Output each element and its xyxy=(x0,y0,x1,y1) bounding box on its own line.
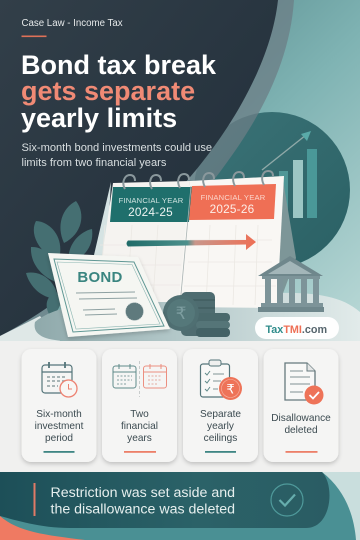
banner text xyxy=(50,485,235,518)
subtitle: Six-month bond investments could use xyxy=(22,142,212,154)
calendar: FINANCIAL YEAR xyxy=(201,193,266,202)
bar chart with rising arrow xyxy=(262,131,317,219)
coins: ₹ xyxy=(176,304,186,323)
TaxTMI logo pill: TaxTMI.com xyxy=(266,324,327,336)
calendar: FINANCIAL YEAR xyxy=(119,196,184,205)
calendar back stand xyxy=(270,180,296,296)
teal circle behind chart xyxy=(194,112,350,268)
bottom teal wave xyxy=(0,472,356,540)
financial year 2024-25 header xyxy=(110,187,192,222)
coral corner xyxy=(0,516,85,540)
card: two financial years: financial xyxy=(121,421,158,432)
leaves xyxy=(26,201,92,316)
dark header shape xyxy=(0,0,278,336)
title: yearly limits xyxy=(21,103,177,133)
card: separate yearly ceilings: yearly xyxy=(207,421,235,432)
title xyxy=(21,50,217,133)
title: gets separate xyxy=(21,76,195,106)
card: two financial years xyxy=(102,349,177,462)
background: teal gradient xyxy=(0,0,360,345)
timeline arrow xyxy=(126,234,256,250)
title: Bond tax break xyxy=(21,50,217,80)
calendar page right xyxy=(178,176,284,308)
pale floor left of pedestal xyxy=(0,316,60,341)
translucent curved band xyxy=(0,0,294,345)
card: separate yearly ceilings xyxy=(183,349,258,462)
subtitle xyxy=(22,142,212,169)
subtitle: limits from two financial years xyxy=(22,157,167,169)
bottom background xyxy=(0,472,360,540)
calendar page left xyxy=(95,181,190,302)
banner text: the disallowance was deleted xyxy=(50,502,235,518)
bond certificate xyxy=(48,253,170,337)
icon: calendar with clock xyxy=(42,362,77,397)
lower light panel xyxy=(0,341,360,472)
card: disallowance deleted: Disallowance xyxy=(271,413,331,424)
bond certificate: BOND xyxy=(77,269,123,286)
card: disallowance deleted xyxy=(264,349,338,462)
card: six-month investment period xyxy=(22,349,96,462)
banner accent bar xyxy=(34,483,36,516)
TaxTMI logo pill xyxy=(255,317,339,339)
icon: check circle xyxy=(271,484,303,516)
icon: document with check badge xyxy=(285,363,324,404)
case law label: Case Law - Income Tax xyxy=(22,18,123,29)
financial year 2025-26 header xyxy=(189,184,276,220)
bank building xyxy=(258,256,324,312)
card: six-month investment period: investment xyxy=(35,421,84,432)
card: two financial years: Two xyxy=(130,409,149,420)
conclusion banner xyxy=(0,472,330,528)
accent rule xyxy=(22,36,46,37)
icon: checklist with rupee badge: ₹ xyxy=(226,382,235,396)
card: two financial years: years xyxy=(127,433,152,444)
calendar rings xyxy=(123,171,273,189)
pedestal xyxy=(35,293,360,341)
card: six-month investment period: period xyxy=(45,433,73,444)
card: disallowance deleted: deleted xyxy=(284,425,318,436)
banner text: Restriction was set aside and xyxy=(50,485,235,501)
card: separate yearly ceilings: ceilings xyxy=(204,433,237,444)
calendar grid xyxy=(96,225,276,305)
calendar: 2025-26 xyxy=(210,202,255,216)
coins xyxy=(163,292,230,337)
card: six-month investment period: Six-month xyxy=(36,409,82,420)
card: separate yearly ceilings: Separate xyxy=(200,409,241,420)
calendar: 2024-25 xyxy=(128,205,173,219)
icon: two calendars xyxy=(113,361,166,397)
calendar xyxy=(94,171,296,308)
